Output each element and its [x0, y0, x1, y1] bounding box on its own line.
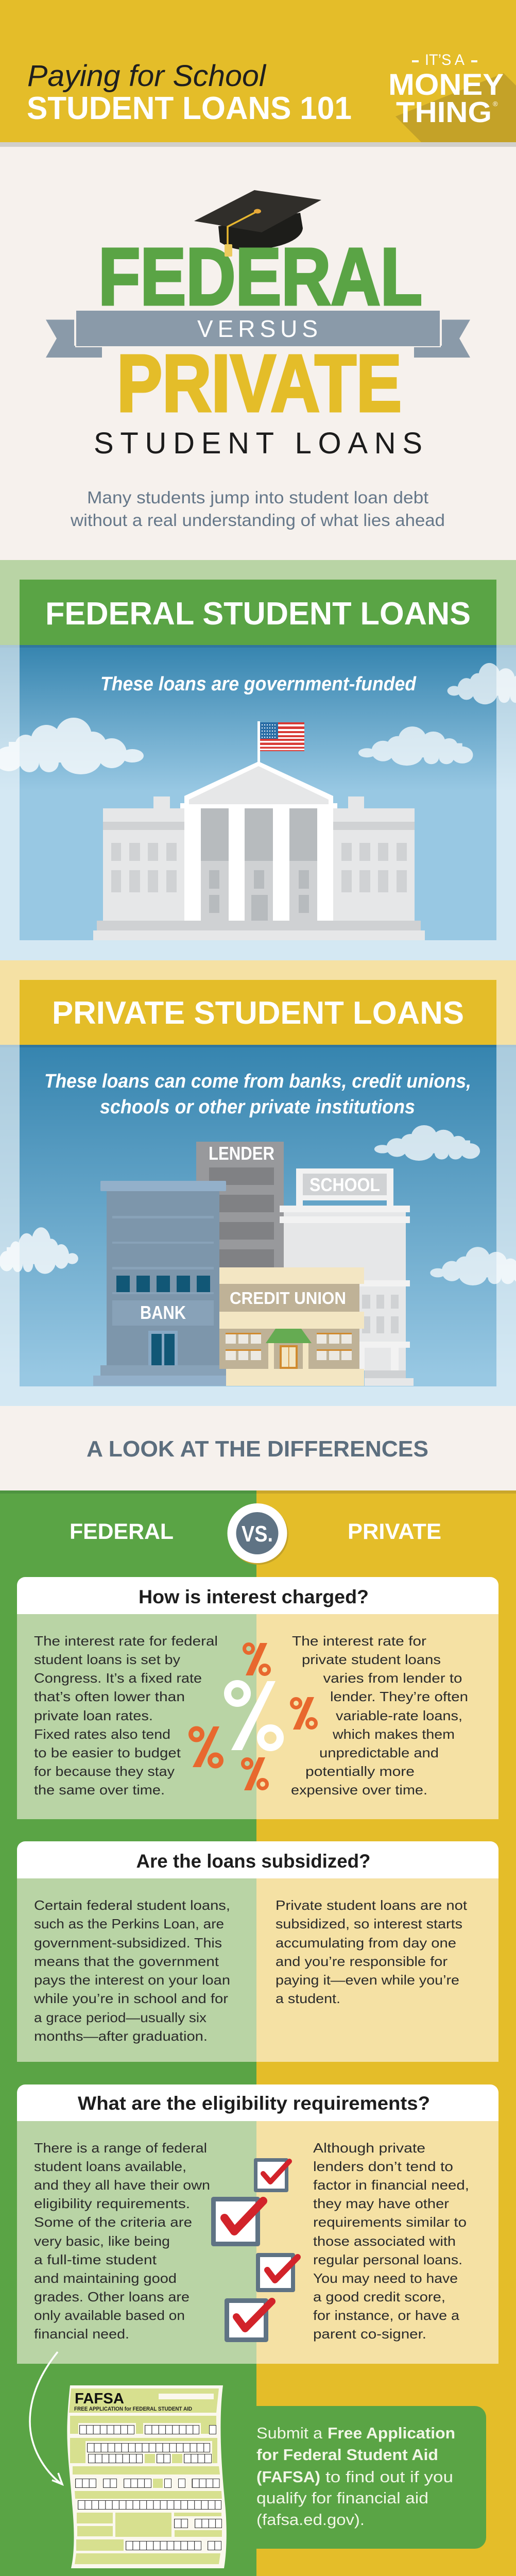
- private text: lenders don’t tend to: [313, 2159, 453, 2174]
- federal text: [34, 2140, 210, 2342]
- private text: lender. They’re often: [330, 1689, 468, 1704]
- clouds: [0, 1125, 516, 1285]
- main title block: [46, 190, 470, 530]
- private text: which makes them: [332, 1726, 455, 1742]
- column headings: federal vs private: FEDERAL: [70, 1519, 174, 1544]
- federal text: to be easier to budget: [34, 1745, 181, 1760]
- icon: large percent sign: [228, 1681, 280, 1750]
- private text: Private student loans are not: [276, 1897, 468, 1913]
- building: lender: LENDER: [209, 1143, 274, 1164]
- intro text: without a real understanding of what lies ahead: [70, 511, 445, 530]
- card: are the loans subsidized: [17, 1841, 498, 2062]
- ribbon: versus: [46, 309, 470, 358]
- private text: subsidized, so interest starts: [276, 1916, 462, 1931]
- icon: graduation cap: [194, 190, 321, 250]
- sky background: [0, 1045, 516, 1406]
- card: how is interest charged: [17, 1577, 498, 1819]
- private text: expensive over time.: [291, 1782, 427, 1798]
- logo: It's a Money Thing: [388, 52, 516, 142]
- federal text: pays the interest on your loan: [34, 1972, 230, 1988]
- private text: parent co-signer.: [313, 2326, 426, 2342]
- federal text: government-subsidized. This: [34, 1935, 222, 1951]
- callout text: to find out if you: [325, 2468, 453, 2486]
- federal text: There is a range of federal: [34, 2140, 207, 2156]
- private text: a good credit score,: [313, 2289, 445, 2304]
- federal text: student loans is set by: [34, 1652, 180, 1667]
- icons: checkboxes: [213, 2160, 298, 2340]
- private text: varies from lender to: [323, 1670, 462, 1686]
- form subtitle: FREE APPLICATION for FEDERAL STUDENT AID: [74, 2406, 192, 2412]
- heading: federal student loans: FEDERAL STUDENT LOANS: [45, 596, 471, 632]
- federal text: and maintaining good: [34, 2270, 177, 2286]
- federal text: the same over time.: [34, 1782, 165, 1798]
- icon: american flag: [257, 721, 304, 762]
- question heading: What are the eligibility requirements?: [78, 2093, 430, 2114]
- question heading: How is interest charged?: [139, 1586, 369, 1607]
- federal text: while you’re in school and for: [33, 1991, 228, 2006]
- callout text: (fafsa.ed.gov).: [256, 2511, 365, 2529]
- callout text: for Federal Student Aid: [256, 2446, 438, 2464]
- building: lender: [196, 1142, 284, 1267]
- federal text: a full-time student: [34, 2252, 157, 2267]
- illustration: government building: [93, 761, 425, 940]
- federal text: months—after graduation.: [34, 2028, 208, 2044]
- callout: FAFSA: [256, 2406, 486, 2549]
- private text: those associated with: [313, 2233, 456, 2249]
- building: school: [280, 1168, 414, 1386]
- private text: [276, 1897, 468, 2006]
- question heading: Are the loans subsidized?: [136, 1851, 371, 1872]
- private text: variable-rate loans,: [336, 1708, 462, 1723]
- federal text: Congress. It’s a fixed rate: [34, 1670, 202, 1686]
- logo: It's a Money Thing: THING: [396, 96, 492, 129]
- private text: regular personal loans.: [313, 2252, 462, 2267]
- sky background: [0, 645, 516, 960]
- title word: Private: PRIVATE: [117, 338, 402, 429]
- callout text: qualify for financial aid: [256, 2489, 428, 2507]
- column headings: federal vs private: [70, 1503, 441, 1565]
- logo: It's a Money Thing: MONEY: [388, 68, 504, 101]
- private text: they may have other: [313, 2196, 449, 2211]
- building: credit union: CREDIT UNION: [230, 1289, 346, 1308]
- subheading: schools or other private institutions: [100, 1096, 415, 1118]
- federal text: such as the Perkins Loan, are: [34, 1916, 224, 1931]
- series title: Paying for School: [27, 59, 267, 93]
- federal text: a grace period—usually six: [34, 2010, 207, 2025]
- intro text: Many students jump into student loan debt: [87, 488, 428, 507]
- federal text: and they all have their own: [34, 2177, 210, 2193]
- subheading: These loans can come from banks, credit unions,: [44, 1071, 471, 1092]
- panel: federal student loans: [0, 560, 516, 960]
- building: school: SCHOOL: [309, 1174, 380, 1195]
- private text: Although private: [313, 2140, 425, 2156]
- title line: Student Loans: STUDENT LOANS: [94, 427, 422, 460]
- subheading: [44, 1071, 471, 1118]
- icon: vs badge: VS.: [242, 1521, 273, 1547]
- federal text: Certain federal student loans,: [34, 1897, 230, 1913]
- private text: private student loans: [302, 1652, 441, 1667]
- private text: [313, 2140, 469, 2342]
- header banner: [0, 0, 516, 147]
- private text: for instance, or have a: [313, 2308, 460, 2323]
- illustration: FAFSA form: [67, 2385, 227, 2568]
- callout text: Free Application: [328, 2424, 455, 2442]
- private text: The interest rate for: [292, 1633, 426, 1649]
- private text: You may need to have: [313, 2270, 458, 2286]
- header title: STUDENT LOANS 101: [27, 91, 352, 126]
- building: bank: [93, 1181, 233, 1386]
- logo: It's a Money Thing: ®: [493, 100, 498, 108]
- private text: a student.: [276, 1991, 340, 2006]
- icons: small percent signs: [191, 1643, 316, 1790]
- building: bank: BANK: [140, 1302, 186, 1323]
- federal text: eligibility requirements.: [34, 2196, 190, 2211]
- private text: unpredictable and: [319, 1745, 439, 1760]
- heading: private student loans: PRIVATE STUDENT LOANS: [52, 995, 464, 1031]
- panel: private student loans: [0, 960, 516, 1406]
- federal text: private loan rates.: [34, 1708, 153, 1723]
- icon: tassel: [225, 244, 232, 257]
- private text: accumulating from day one: [276, 1935, 456, 1951]
- federal text: for because they stay: [34, 1764, 175, 1779]
- federal text: that’s often lower than: [34, 1689, 185, 1704]
- ribbon: versus: VERSUS: [197, 315, 318, 342]
- arrow: to FAFSA form: [30, 2352, 62, 2484]
- federal text: means that the government: [34, 1954, 219, 1969]
- heading: a look at the differences: A LOOK AT THE DIFFERENCES: [87, 1436, 428, 1462]
- federal text: [34, 1633, 218, 1798]
- subheading: These loans are government-funded: [100, 673, 417, 695]
- form cells: [75, 2426, 221, 2550]
- federal text: Some of the criteria are: [34, 2214, 192, 2230]
- private text: [291, 1633, 468, 1798]
- federal text: only available based on: [34, 2308, 185, 2323]
- federal text: [33, 1897, 230, 2044]
- panel: comparison background: [0, 1490, 516, 2576]
- intro text: [70, 488, 445, 530]
- callout text: [256, 2424, 455, 2529]
- federal text: The interest rate for federal: [34, 1633, 218, 1649]
- federal text: Fixed rates also tend: [34, 1726, 170, 1742]
- callout text: Submit a: [256, 2424, 323, 2442]
- card: what are the eligibility requirements: [17, 2084, 498, 2364]
- private text: and you’re responsible for: [276, 1954, 448, 1969]
- title word: Federal: FEDERAL: [98, 232, 422, 322]
- form title: FAFSA: [75, 2391, 124, 2407]
- private text: requirements similar to: [313, 2214, 467, 2230]
- building: credit union: [219, 1267, 364, 1386]
- federal text: financial need.: [34, 2326, 129, 2342]
- private text: potentially more: [305, 1764, 415, 1779]
- federal text: very basic, like being: [34, 2233, 170, 2249]
- logo: It's a Money Thing: IT’S A: [425, 52, 465, 69]
- federal text: student loans available,: [34, 2159, 186, 2174]
- icon: vs badge: [228, 1503, 288, 1565]
- private text: factor in financial need,: [313, 2177, 469, 2193]
- private text: paying it—even while you’re: [276, 1972, 459, 1988]
- clouds: [0, 663, 516, 774]
- column headings: federal vs private: PRIVATE: [348, 1519, 441, 1544]
- federal text: grades. Other loans are: [34, 2289, 190, 2304]
- callout text: (FAFSA): [256, 2468, 320, 2486]
